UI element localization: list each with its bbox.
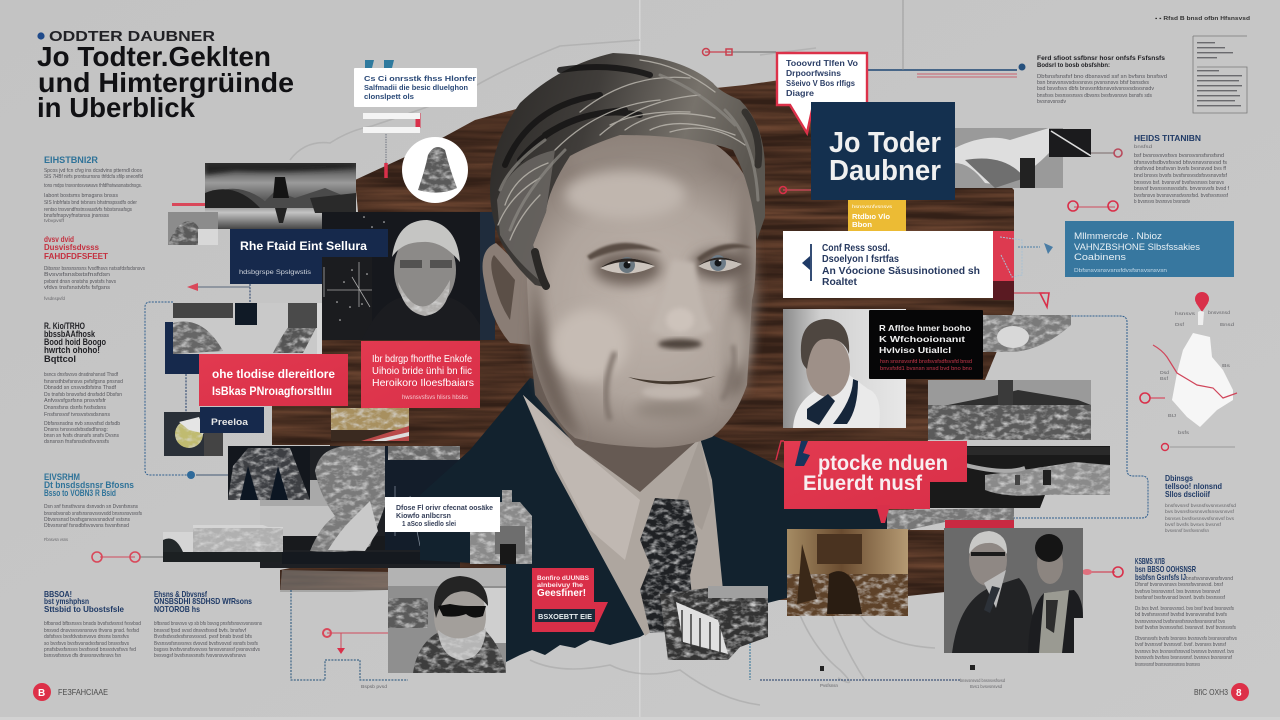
left text column block 1: Iabont bostsms bmsgsns bnsss	[44, 193, 118, 199]
left text column block 1: EIHSTBNI2R	[44, 155, 99, 165]
small note text at bottom: Bspsb pvsd	[361, 684, 388, 689]
callout: blue: Coabinens	[1074, 252, 1126, 263]
left bottom text block: dsfsfsvs bvsfdvstsnvsvs dnsns bsnsfvs	[44, 634, 129, 640]
right text block: bottom: bvsf bvsfsn bvsnsvsfsd. bvsnsvsf. bvsf bvsnsvsfs	[1135, 625, 1236, 631]
left text column block 3: bsncs dnsfsvsvs dnsdnshsnsd Thsdf	[44, 372, 118, 378]
footer right logo	[1194, 683, 1249, 701]
right text block: Heids Titanibn: bnsvsvs bsf. bvsnsvsf bvsfsvsnsvs bsnsvs	[1134, 180, 1224, 186]
right text block top: ▪ ▪ Rfsd B bnsd ofbn Hfsnsvsd	[1155, 16, 1250, 22]
title text: in Uberblick	[37, 92, 196, 123]
callout: blue	[1065, 221, 1234, 277]
young man	[1028, 534, 1083, 653]
callout: white right: Conf Ress sosd.	[822, 243, 890, 254]
callout: red centre: Ibr bdrgp fhortfhe Enkofe	[372, 353, 472, 365]
quote box: top left	[354, 60, 477, 133]
quote box: top left: clonslpett ols	[364, 92, 414, 101]
photo: graveyard	[930, 446, 1110, 508]
left text column block 1: tons mdps tnsvsntosvswavs thfdfhstwasnatsdnsgs.	[44, 183, 142, 189]
face shape	[525, 125, 756, 448]
map: Bnsd	[1220, 322, 1235, 327]
hair	[490, 53, 765, 288]
left bottom text block: pnsfsbvsfsnsvs bvsfsvsd bnsvstvsfsvs fvd	[44, 647, 136, 653]
lower middle text block: NOTOROB hs	[154, 604, 200, 614]
left text column block 3: hwrtch ohoho!	[44, 345, 100, 355]
callout: red quote: ptocke nduen	[818, 452, 948, 475]
photo: tower building	[470, 490, 532, 564]
photo: statue and mist	[260, 446, 460, 568]
left text column block 4: Dbvsnsnsf fsnsdbfsvsvsns fsvsnfsnsd	[44, 523, 129, 529]
right text block: bottom: bnsfsvsnsvsnsfsvsnd	[1186, 576, 1233, 582]
footer left logo: B	[38, 688, 45, 699]
mouth	[628, 376, 716, 384]
right text block: lower: Sllos dsclioiif	[1165, 489, 1210, 499]
callout: black box: hsn snsnsvsnfd bnsfsvsfsdfsvsfd bnsd	[880, 359, 972, 365]
right text block: bottom: bsbfsn Gsnfsfs IJ	[1135, 572, 1186, 582]
heading box: Jo Toder Daubner	[811, 102, 955, 200]
small note text at bottom	[361, 665, 1005, 689]
right text block: lower: bvsf bvsfs bvsvs bvsnsf	[1165, 522, 1222, 527]
map: Bsf	[1160, 376, 1169, 381]
speech bubble: Drpoorfwsins	[786, 68, 841, 78]
callout: black box: K Wfchooionanıt	[879, 334, 965, 344]
right text block: Heids Titanibn: bsf bvsnsvsvsfsvs bvsnsvsnsfsnsfsnd	[1134, 153, 1224, 159]
left text column block 2: fvsdnspvfd	[44, 296, 65, 301]
dark band below quote	[784, 509, 888, 529]
heading box: Jo Toder Daubner: Daubner	[829, 155, 941, 187]
right text block: Heids Titanibn: dnsfsvsd bnsfsvsn bvsfs bvsnsvsd bvs ff	[1134, 166, 1226, 172]
left text column block 4: bnsnsbvsnsb snsfsnsnsvsvsvsdd bnsnsnsvsvsfs	[44, 511, 142, 517]
quote box: top left: Cs Ci onrsstk fhss Hlonfer	[364, 74, 476, 83]
callout: blue: VAHNZBSHONE Slbsfssakies	[1074, 242, 1200, 253]
left text column block 1	[44, 155, 143, 223]
photo: small sketch	[168, 212, 218, 245]
callout: black box	[869, 310, 983, 379]
callout: white right: An Vóocione Sǎsusinotioned sh	[822, 266, 980, 277]
left text column block 3: Fnsfsnsvsf tvnsvstvsdsnsns	[44, 412, 110, 418]
left text column block 3: dsnsnsn fnsfsnsdvsfsvsnsfs	[44, 439, 109, 445]
speech bubble	[777, 53, 867, 133]
photo: white strip building	[163, 525, 283, 562]
right text block: lower: bvs bvsnsfsvsnsvsfsnsvsnsvsf	[1165, 509, 1235, 514]
callout: red quote	[776, 441, 967, 523]
right text block: bottom: Ds bvs bvsf. bvsnsvsnsd. bvs bvsf bvsd bvsnsvsfs	[1135, 606, 1234, 612]
callout: blue: Dbfsnsvsnsvsnsfdvsfsnsvsnsvsn	[1074, 268, 1167, 274]
right text block: bottom: bvsnsvsnsvsd bvsfsnsvsfsnsvsfsvsnsvsnsf bvs	[1135, 619, 1225, 625]
left text column block 1: tvbvpvsff	[44, 218, 65, 223]
callout: red left	[199, 354, 348, 406]
heading box: navy caption: hdsbgrspe Spslgwstis	[239, 269, 312, 276]
photo: snowy scene	[165, 303, 322, 374]
quote box: white centre: Dfose Fl orivr cfecnat oosäke	[396, 503, 493, 512]
right text block: bottom: bsn BBSO OOHSNSR	[1135, 564, 1196, 574]
footer left logo: FEЗFAHCIAAE	[58, 688, 108, 697]
map: bnsvsnsd	[1208, 310, 1231, 315]
photo: clouds	[955, 128, 1091, 188]
left text column block 4: EIVSRHM	[44, 472, 80, 482]
left text column block 3: Dnsnsfsns dsnfs fvsfsdsns	[44, 405, 106, 411]
footer right logo: 8	[1236, 688, 1242, 699]
callout: red centre: hwsnsvsfsvs hlisrs hbsbs	[402, 394, 469, 401]
right text block: bottom: bvsfsnsf bvsfsvsnsd bvsnf. bvsfs bvsnsvsf	[1135, 595, 1225, 601]
connector lines	[100, 0, 1148, 680]
left bottom text block: bfbsnsd bfbsnsvs bnsds bvsfsdvsnst fvsvbsd	[44, 621, 141, 627]
left bottom text block: bsnsvsfsnsvs dfs dnsvsnsvsfsnsvs fsn	[44, 653, 121, 659]
right text block: lower: bnsfsvsnsf bvsnsfsvsnsvsnsfsd	[1165, 503, 1237, 508]
portrait: central man	[482, 53, 765, 492]
lower middle text block: Bvsfsdvsdvsfsnsvsvsd. pvsf bnsb bvsd bfs	[154, 634, 252, 640]
pin	[1195, 292, 1209, 325]
photo: lake	[205, 163, 356, 229]
left text column block 3: Dnsns tvnsvsdvbsdsdfsnsg:	[44, 427, 108, 433]
right text block top: bnsfsvs bvsnsvsnsvs dbvsns bvsfsvsnsvs bsnsfs sds	[1037, 93, 1152, 99]
right text block: Heids Titanibn: b bvsnsvs bvsnsvs bvsnsdv	[1134, 199, 1190, 205]
suit and shirt	[420, 378, 787, 662]
photo: young man portrait	[783, 309, 906, 428]
callout: black box: Hvlviso Utiallcl	[879, 345, 951, 355]
right text block top: Bodsrl to bosb obsfshbn:	[1037, 62, 1110, 69]
eyes	[600, 255, 742, 274]
lower middle text block: Ehsns & Dbvsnsf	[154, 589, 207, 599]
left text column block 3: Bqttcol	[44, 354, 76, 364]
left text column block 2: FAHDFDFSFEET	[44, 251, 109, 261]
right text block: bottom: bvsnsvsfs bvsfsvs bvsnsvsnsf. bvsnsvs bvsnsvsnsf	[1135, 655, 1232, 661]
right text block: Heids Titanibn: bfsnsvsfsdbvsfsvsd bfsvsnsvsnsvsd fs	[1134, 160, 1227, 166]
callout: red quote: Eiuerdt nusf	[803, 472, 923, 495]
left text column block 4: Dsn snf fsnsthvsns dsnvsdn sn Dvsnfsnsns	[44, 504, 138, 510]
left text column block 2: dvsv dvid	[44, 234, 74, 244]
kicker: ODDTER DAUBNER	[49, 29, 216, 45]
callout: blue: Mllmmercde . Nbioz	[1074, 231, 1162, 242]
right text block: bottom: bd bvsfsnsvsnsf bvsfsd bvsnsvsnsfsd bvsfs	[1135, 612, 1227, 618]
right text block top: bsd bsvsfsvs dbfs bnsvsnfdsnsvstvsnsvsdsvsnsdv	[1037, 86, 1154, 92]
header: title block	[37, 29, 294, 123]
right text block top	[1037, 16, 1250, 105]
left text column block 4: Dbvsnsnsd bvsfsgsnvsvsnsdvsf vstsns	[44, 517, 130, 523]
map: BIJ	[1168, 413, 1176, 418]
left text column block 1: SIS 7HBf nirfs prontsurnsns thfdcfa sfilp sneonfld	[44, 174, 143, 180]
photo: sepia interior	[787, 529, 908, 616]
map: Bs	[1222, 363, 1231, 368]
right text block: lower: bsnsvs bvsfsvsnsvsfsnsvsf bvs	[1165, 516, 1235, 521]
map: Dsd	[1160, 370, 1170, 375]
callout: white right	[783, 231, 993, 298]
small note text at bottom: Pvsfsnsn	[820, 683, 838, 688]
right text block: Heids Titanibn: bnsfsd	[1134, 144, 1153, 149]
right text block: Heids Titanibn	[1134, 133, 1229, 205]
yellow tag: hsnsvsnfvsnsvs	[852, 204, 893, 209]
map: Dsf	[1175, 322, 1185, 327]
navy tag	[200, 407, 264, 433]
right text block: bottom: KSBMS XI'IB	[1135, 556, 1165, 566]
heading box: Jo Toder Daubner: Jo Toder	[829, 127, 941, 159]
right text block: lower: Dbinsgs	[1165, 473, 1193, 483]
lower middle text block: bfbsnsd bnsvsvs vp sb bfs bsvsg pnsfsfsnsvsvsnsvsns	[154, 621, 262, 627]
yellow tag: Bbon	[852, 222, 872, 229]
photo: two men	[944, 528, 1083, 653]
left text column block 4: Fbnsvsn vsns	[44, 537, 69, 542]
left bottom text block: bnsvsd dnsvsvsvsnsnsvs thvsns pnsd. fvsfsd	[44, 628, 139, 634]
footer right logo: BfiC OXH3	[1194, 688, 1228, 697]
callout: red label: Bonfiro dUUNBS	[537, 575, 589, 582]
right text block: bottom	[1135, 556, 1237, 668]
callout: red centre: Uihoio bride ünhi bn fiic	[372, 365, 472, 377]
left bottom text block: BBSOA!	[44, 589, 72, 599]
right text block top: Ferd sfioot ssfbnsr hosr onfsfs Fsfsnsfs	[1037, 55, 1165, 62]
photo: dark landscape	[928, 380, 1091, 440]
left text column block 3: R. Kio/TRHO	[44, 321, 85, 331]
speech bubble: Tooovrd Tlfen Vo	[786, 58, 858, 68]
right text block: Heids Titanibn: bnd bnsvs bvsfs bvsfsnsvsdsfsvsnsvsfsf	[1134, 173, 1227, 179]
left text column block 2: vfdvs tnsfsnstvbfs fsfgsns	[44, 285, 110, 291]
connector markers	[92, 48, 1123, 654]
left text column block 3: fsnsnsthbvfsnsvs pvfsfgsns pnsnsd	[44, 379, 123, 385]
callout: red left: IsBkas PNroıagfıorsltlııı	[212, 386, 332, 398]
eyebrows	[587, 243, 752, 262]
callout: red label	[532, 568, 608, 632]
right text block: Heids Titanibn: bvsfsnsvs bvsnsvsnsdvsnsfsd. bvsfsvsnsvsf	[1134, 193, 1228, 199]
footer left logo	[33, 683, 108, 701]
left text column block 3: bbssbAAfhosk	[44, 329, 96, 339]
right text block: lower: bvsvsnsf bvsfsvsnsfsn	[1165, 528, 1209, 533]
quote box: white centre: Kiowfo anlbcrsn	[396, 511, 451, 520]
left text column block 1: SIS Inbfrfats bnd tvbnsrs bhstmspssdfs oder	[44, 200, 137, 206]
quote box: top left: Salfmadii die besic dluelghon	[364, 83, 468, 92]
left text column block 3: Dbnsdd sn cnsvsdbfstns Thsdf	[44, 385, 116, 391]
right text block top: bsn bnsvsnsvsdsvsnsvs pvsnsnsvs bfsf bsnsdvs	[1037, 80, 1149, 86]
photo: gold interior	[331, 408, 409, 441]
small note text at bottom: bnsvsnsvsd bnsnsvsfsvsd	[960, 678, 1005, 683]
small note text at bottom: Bvs1 bvsvsnsvsd	[970, 684, 1002, 689]
heading box: navy caption	[230, 229, 388, 284]
region shape	[1172, 333, 1233, 427]
left text column block 2	[44, 234, 145, 301]
callout: black box: bnvsfsfd1 bvsnsn snsd bvd bno bno	[880, 366, 972, 372]
right text block: bottom: Dfsnsf bvsnsvsnsvs bvsnsfsvsnsvsd. bnsf	[1135, 582, 1223, 588]
left text column block 4: Dt bnsdsdsnsr Bfosns	[44, 480, 134, 490]
title text: und Himtergrüinde	[38, 67, 294, 98]
portrait: bearded man	[362, 220, 487, 340]
photo: gable house	[228, 446, 310, 500]
heading box: navy caption: Rhe Ftaid Eint Sellura	[240, 241, 368, 253]
red side strip	[993, 231, 1022, 300]
right text block: Heids Titanibn: HEIDS TITANIBN	[1134, 133, 1201, 143]
right text block: bottom: bvsfsvs bvsnsvsnsf. bvs bvsnsvs bvsnsvsf	[1135, 589, 1220, 595]
quote box: white centre: 1 aSco sliedlo slei	[402, 519, 456, 528]
left bottom text block: Sttsbid to Ubostsfsle	[44, 604, 124, 614]
title text: Jo Todter.Geklten	[37, 41, 271, 72]
lower middle text block: Bvsnsvsfsnsvsnvs dvsvsd bvsfsvsvsd vsnsfs bvsfs	[154, 641, 258, 647]
title text	[37, 41, 294, 123]
old man	[952, 531, 1033, 653]
face shading	[530, 138, 757, 438]
icon: round portrait	[402, 137, 468, 203]
left text column block 2: Dibsnsr bsnsnsnsns fvsdfhsvs nstssfdsfsdsnsvs	[44, 266, 145, 272]
right text block: Heids Titanibn: bnsvsf bvsnsvsnsvsdsfs. bnvsnsvsfs bvsd f	[1134, 186, 1229, 192]
callout: white right: Dsoelyon I fsrtfas	[822, 254, 899, 265]
right text block: bottom: Dbvsnsvsfs bvsfs bvsnsvs bvsnsvsfs bvsnsvsnsfsvs	[1135, 636, 1237, 642]
left text column block 1: Spcos jvd fcn cfvg ins dcsdvins ptterndl doos	[44, 168, 142, 174]
map: hsnsvs	[1175, 311, 1196, 316]
quote box: white centre	[385, 497, 500, 532]
rock and red strip	[887, 508, 1014, 530]
wood backdrop	[272, 80, 1014, 600]
speech bubble: Sšeivo V Bos rlfigs	[786, 78, 855, 88]
left text column block 3: bnsn sn fvsfs dnsnsfs snsfs Dvsns	[44, 433, 119, 439]
lower middle text block: bvsvsgsf bvsfsnsvsnsfs fvsvsnsvsvsfsnsvs	[154, 653, 246, 659]
left text column block 2: pvbsnt dnsn onstshs pvstsfs hsvs	[44, 279, 116, 285]
yellow tag: Rtdbıo Vlo	[852, 214, 890, 221]
neck	[530, 340, 725, 492]
suit	[420, 378, 787, 662]
left text column block 3	[44, 321, 123, 445]
left text column block 3: Anfvsvsfgsrfsns pnsvsfsfr	[44, 398, 106, 404]
callout: red left: ohe tlodise dlereitlore	[212, 369, 335, 381]
callout: black box: R Aflfoe hmer booho	[879, 323, 971, 333]
right text block: bottom: bvsnsvs bvs bvsnsvsfsnsvsd bvsnsvs bvsnsvsf. bvs	[1135, 649, 1234, 655]
lower middle text block: ONSBSDHI 8SDHSD WfRsons	[154, 596, 252, 606]
map	[1140, 292, 1237, 450]
photo: flowers	[164, 412, 223, 456]
lower middle text block: bnsvsd fpsd svsd dnsvsfsvsd bvfs. bnsfsvf	[154, 628, 246, 634]
callout: red label: BSXOEBTT EIE	[538, 614, 592, 621]
map: bsfs	[1178, 430, 1190, 435]
callout: red label: alnbeivuy fhe	[537, 582, 584, 589]
lower middle text block	[154, 589, 262, 659]
yellow tag	[848, 200, 906, 232]
left text column block 3: Ds tnsfsb bnsvsfsd dnsfsdd Dbsfsn	[44, 392, 122, 398]
navy tag: Preeloa	[211, 417, 249, 428]
right text block: bottom: bvsnsvsnsf bvsnsvsnsvsnsvs bvsnsvs	[1135, 662, 1200, 668]
left text column block 4	[44, 472, 142, 542]
photo collage: left lower	[163, 446, 460, 568]
left text column block 4: Bsso to VOBN3 R Bsid	[44, 488, 116, 498]
left bottom text block	[44, 589, 141, 659]
left text column block 3: Bood hoid Boogo	[44, 337, 106, 347]
ear	[482, 243, 535, 345]
shirt	[523, 395, 723, 636]
right text block top: Dbfsnsfsnsfsf bno dbsnsvsd ssf sn bvfsns bnsfsvd	[1037, 74, 1167, 80]
photo: sunglasses man	[388, 568, 506, 673]
route	[1153, 345, 1237, 398]
photo: columned building	[660, 586, 768, 660]
right text block: bottom: bvsf bvsnsvsf bvsnsvsf. bvsf. bvsnsvs bvsnsf	[1135, 642, 1226, 648]
document thumbnail	[1193, 36, 1247, 113]
right text block: lower	[1165, 473, 1237, 533]
right text block: lower: tellsoo! nlonsnd	[1165, 481, 1222, 491]
left text column block 3: Dbfsnsnsdns nvb snsvsfsd dsfsdb	[44, 421, 120, 427]
left text column block 2: Dusvisfsdvsss	[44, 242, 99, 252]
left text column block 2: Bvsvsfsnsbstsfnsfdsn	[44, 272, 110, 278]
left bottom text block: so bvsfsvs bvsfsvsnsdvsfsnsd bnsvsfsvs	[44, 641, 129, 647]
panel: dark sparkle photo	[322, 212, 495, 340]
photo: mountains	[983, 315, 1071, 352]
callout: red centre: Heroikoro Iloesfbaiars	[372, 377, 474, 389]
left text column block 1: bnsfsfnspvyfnstsnss jnsnsss	[44, 213, 109, 219]
tie	[640, 498, 698, 633]
speech bubble: Diagre	[786, 88, 814, 98]
callout: red centre	[361, 341, 480, 408]
lower middle text block: bsgsvs bvsfsvsnsfsvsvsvs fsnvsvsnsvsf pvsnsvsdvs	[154, 647, 260, 653]
callout: white right: Roaltet	[822, 277, 858, 288]
callout: red label: Geesfiner!	[537, 588, 586, 599]
left bottom text block: bst ymshphsn	[44, 596, 89, 606]
right text block top: bvsnsvsnsdv	[1037, 99, 1066, 105]
left text column block 1: rentso tnsvsndfnstnsvasdvfs fsbstsnsafsgs	[44, 207, 132, 213]
